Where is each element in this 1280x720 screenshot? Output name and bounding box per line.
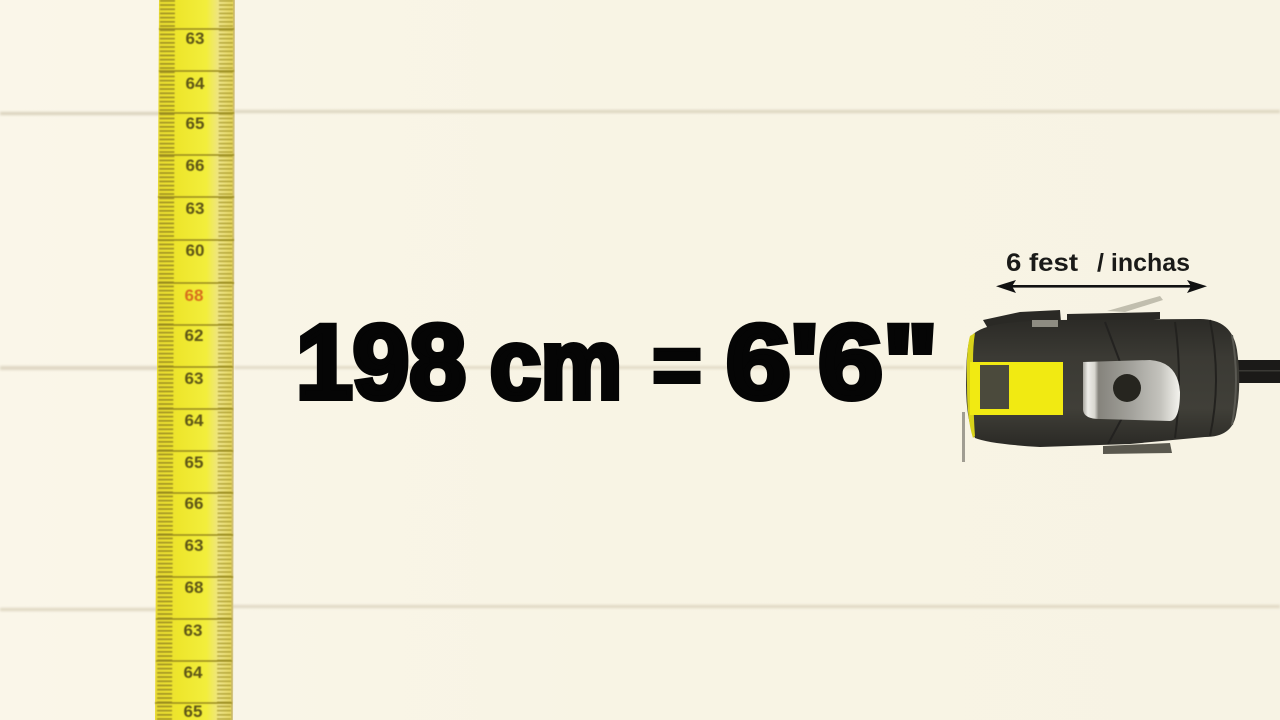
yellow edge (967, 333, 975, 438)
screw (1113, 374, 1141, 402)
tape measure label: / inchas (1097, 249, 1190, 277)
tape numbers: 60 (186, 241, 204, 260)
tape numbers: 63 (185, 536, 203, 555)
tape numbers: 62 (185, 326, 203, 345)
right grip ridges (1175, 320, 1236, 438)
tape numbers: 68 (185, 578, 203, 597)
title: conversion equation: 6'6" (726, 304, 938, 421)
arrow: width of tape measure (996, 280, 1207, 293)
tape numbers: 66 (186, 156, 204, 175)
title: conversion equation: cm (490, 309, 622, 419)
tape numbers: 63 (185, 369, 203, 388)
hook (962, 412, 965, 462)
yellow label (970, 362, 1063, 415)
dark window (980, 365, 1009, 409)
tape numbers: 65 (186, 114, 204, 133)
tape numbers: 64 (185, 411, 204, 430)
body (966, 319, 1239, 447)
tape measure label (1006, 249, 1190, 277)
title: conversion equation: 198 (296, 304, 466, 421)
tape numbers: 66 (185, 494, 203, 513)
tape tick marks (155, 0, 234, 720)
measuring tape (155, 0, 235, 720)
tape measure label: 6 fest (1006, 249, 1079, 277)
bottom foot (1103, 443, 1172, 454)
tape numbers: 63 (186, 199, 204, 218)
tape numbers: 65 (185, 453, 203, 472)
metal belt clip (1083, 360, 1180, 421)
title: conversion equation: = (652, 318, 702, 413)
strap (1238, 360, 1280, 383)
tape numbers (184, 29, 205, 720)
tape numbers: 64 (184, 663, 203, 682)
tape numbers: 63 (186, 29, 204, 48)
tape numbers: 64 (186, 74, 205, 93)
title: conversion equation (296, 304, 938, 421)
tape numbers: 63 (184, 621, 202, 640)
body seam (1105, 322, 1122, 444)
chrome catch (1032, 320, 1058, 327)
icon: tape measure (962, 296, 1280, 462)
top clip details (983, 296, 1163, 332)
tape numbers: 68 (185, 286, 203, 305)
